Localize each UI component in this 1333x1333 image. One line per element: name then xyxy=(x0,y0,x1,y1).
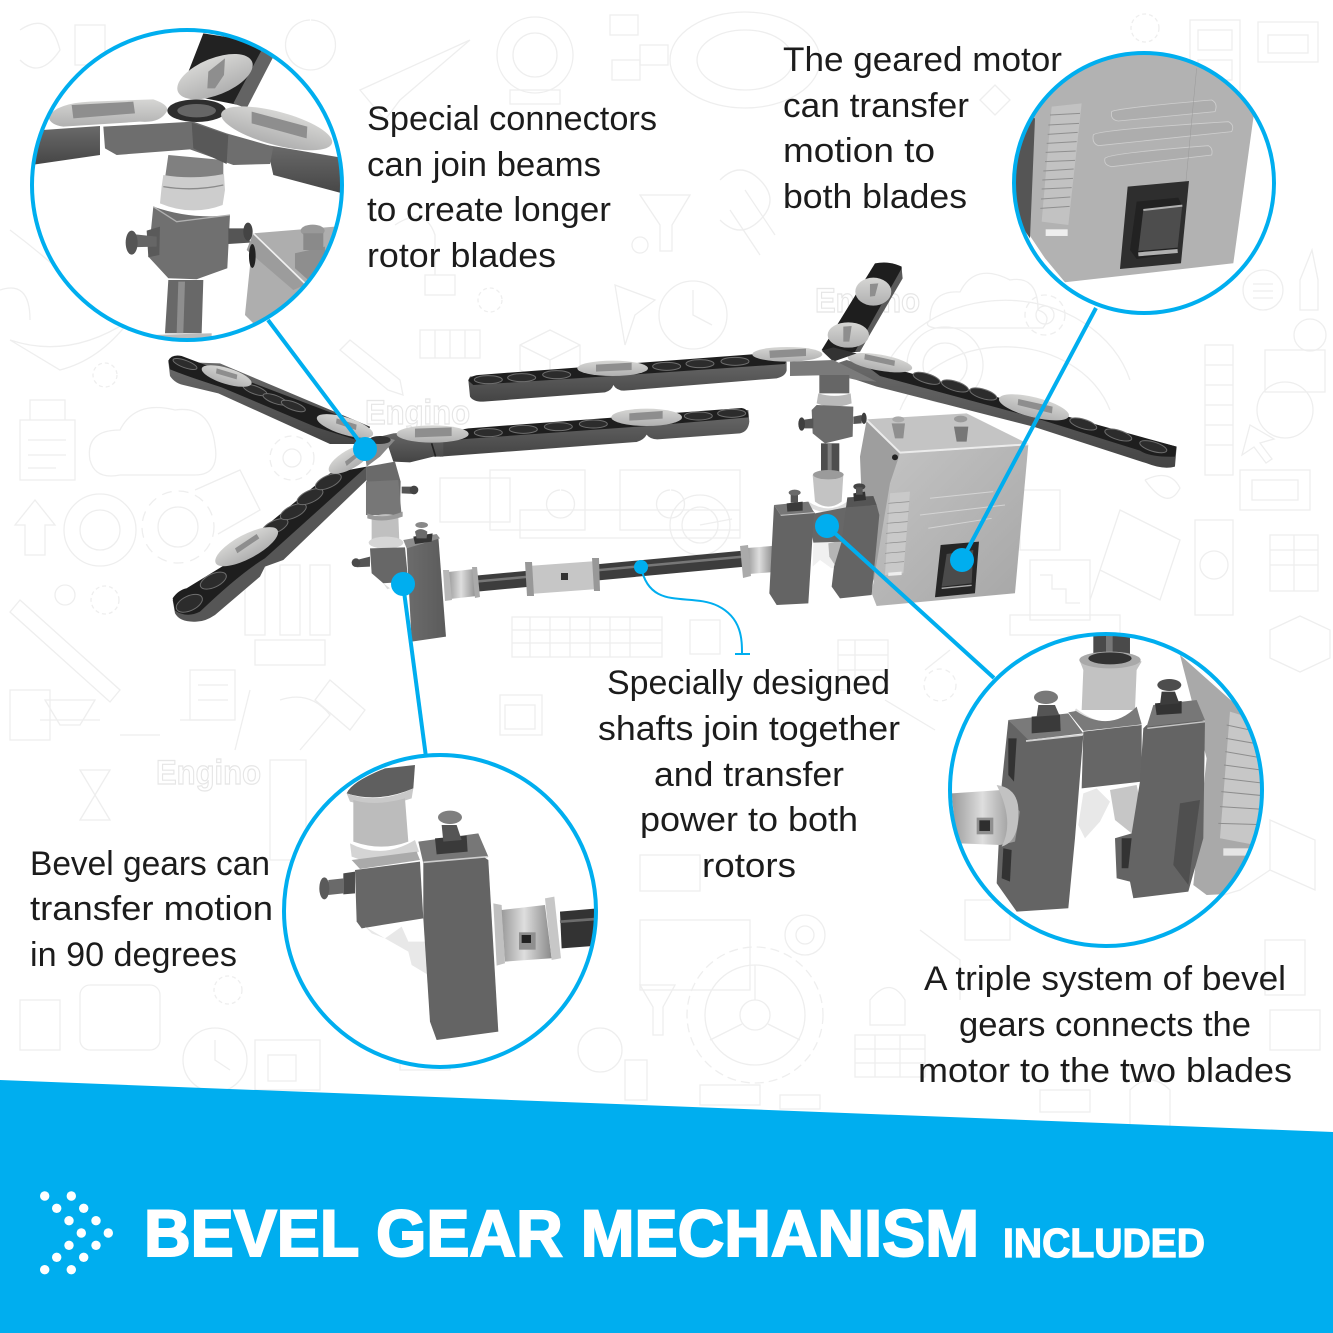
zoom circle 3 artwork xyxy=(319,765,607,1040)
main model: left rotor and gear block xyxy=(168,356,469,642)
bevel gear teeth xyxy=(813,538,843,568)
zoom circle 4 artwork xyxy=(952,635,1273,912)
specially designed shaft xyxy=(443,545,774,601)
text: specially designed shafts: Specially designed xyxy=(607,664,890,702)
leader: motor circle xyxy=(950,308,1096,572)
motor box xyxy=(860,413,1028,606)
rotor arm lower left xyxy=(173,439,375,622)
background Engino logo outlines: Engino xyxy=(815,282,920,320)
text: triple system xyxy=(918,960,1292,1090)
vertical column and connector xyxy=(352,462,446,642)
text: bevel gears: in 90 degrees xyxy=(30,936,237,974)
upper column right xyxy=(817,375,852,407)
leader: triple bevel circle xyxy=(815,514,994,678)
zoom circle 2 artwork xyxy=(1012,52,1258,282)
rotor arm upper left xyxy=(168,356,376,444)
text: special connectors: Special connectors xyxy=(367,100,657,138)
text: geared motor xyxy=(783,41,1062,216)
text: bevel gears: transfer motion xyxy=(30,890,273,928)
zoom circle 1 artwork xyxy=(35,33,340,338)
text: geared motor: motion to xyxy=(783,132,935,170)
background Engino logo outlines: Engino xyxy=(365,394,470,432)
background Engino logo outlines xyxy=(156,282,920,792)
banner subheading: INCLUDED xyxy=(1003,1220,1205,1266)
text: triple system: gears connects the xyxy=(959,1006,1251,1044)
leader: connector circle xyxy=(268,320,377,461)
text: triple system: A triple system of bevel xyxy=(924,960,1286,998)
leader: bevel gear circle xyxy=(391,572,426,757)
upper rotor arm xyxy=(822,263,903,353)
text: special connectors: rotor blades xyxy=(367,237,556,275)
text: specially designed shafts: rotors xyxy=(702,847,796,885)
motor box pins xyxy=(892,416,968,442)
text: bevel gears: Bevel gears can xyxy=(30,845,270,883)
central beams between the two rotors xyxy=(440,354,787,457)
back beam xyxy=(468,354,787,402)
text: geared motor: can transfer xyxy=(783,87,969,125)
banner heading: BEVEL GEAR MECHANISM xyxy=(144,1196,979,1270)
zoom circle: bevel gears xyxy=(284,755,607,1067)
icon: dotted chevron xyxy=(40,1191,113,1274)
text: specially designed shafts: power to both xyxy=(640,801,858,839)
leader: shaft note xyxy=(634,560,750,654)
text: special connectors xyxy=(367,100,657,275)
front beam xyxy=(440,408,749,457)
text: special connectors: to create longer xyxy=(367,191,611,229)
callout lines and dots xyxy=(268,308,1096,757)
lower column and bevel gear bracket right xyxy=(769,405,879,605)
text: specially designed shafts: shafts join together xyxy=(598,710,900,748)
text: geared motor: The geared motor xyxy=(783,41,1062,79)
shaft bushings xyxy=(443,545,774,601)
column connector and shaft xyxy=(798,405,867,512)
text: triple system: motor to the two blades xyxy=(918,1052,1292,1090)
hub plate xyxy=(752,347,822,362)
zoom circle: triple bevel gears xyxy=(950,634,1273,946)
left bracket block xyxy=(769,490,814,605)
blue banner xyxy=(0,1080,1333,1333)
hub of rotor arm toward shaft xyxy=(363,425,469,467)
background Engino logo outlines: Engino xyxy=(156,754,261,792)
zoom circle: geared motor switch xyxy=(1012,52,1274,313)
text: specially designed shafts xyxy=(598,664,900,885)
text: specially designed shafts: and transfer xyxy=(654,756,844,794)
bridge block xyxy=(807,502,846,543)
text: bevel gears xyxy=(30,845,273,974)
motor switch xyxy=(935,542,979,597)
text: special connectors: can join beams xyxy=(367,146,601,184)
text: geared motor: both blades xyxy=(783,178,967,216)
main model: right rotor and motor xyxy=(752,263,1177,606)
right rotor arm xyxy=(790,347,1177,468)
right bracket block xyxy=(832,483,879,598)
zoom circle: special connectors xyxy=(20,30,355,353)
